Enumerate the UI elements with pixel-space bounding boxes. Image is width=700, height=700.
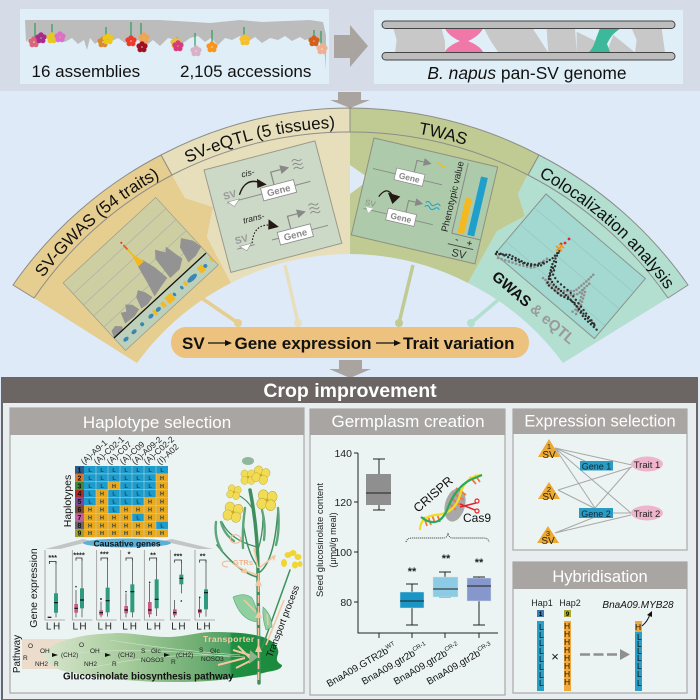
gene nodes: Gene 1 — [582, 462, 611, 472]
pink SV — [445, 28, 483, 52]
haplotype matrix: (A)-C09 — [118, 439, 147, 466]
dashed arrow — [580, 649, 630, 660]
Cas9 label: Cas9 — [463, 511, 491, 525]
haplotype swatches — [537, 610, 571, 618]
box chart: WT — [385, 641, 396, 651]
pointer arrow — [642, 611, 652, 626]
boxplots: L — [98, 622, 104, 633]
cross symbol: × — [551, 649, 559, 664]
chemical steps: O — [28, 643, 33, 650]
haplotype swatches: 9 — [566, 612, 570, 618]
box chart: Seed glucosinolate content — [315, 483, 326, 597]
heading: Expression selection — [524, 412, 676, 430]
haplotype matrix: 2 — [78, 475, 82, 482]
sector: SV-eQTL body — [172, 132, 350, 283]
SV nodes: 2 — [547, 485, 551, 494]
aligned segments — [393, 28, 665, 52]
chemical steps: Glc — [151, 648, 162, 655]
chemical steps: R — [171, 659, 176, 666]
causative genes label — [45, 538, 213, 549]
analysis headings on arc: TWAS — [420, 122, 467, 144]
phylogenetic tree — [25, 20, 326, 70]
chemical steps: Glc — [210, 648, 220, 655]
haplotype matrix: Haplotypes — [62, 475, 74, 527]
boxplots: *** — [100, 550, 109, 559]
chemical steps: R — [23, 655, 28, 662]
box chart — [315, 448, 498, 690]
teal SV — [589, 28, 621, 52]
box chart: BnaA09.GTR2b — [325, 646, 390, 690]
panel: TWAS diagram — [351, 138, 498, 264]
box chart: CR-3 — [477, 641, 493, 653]
panel: TWAS diagram: + — [465, 238, 474, 250]
arrow: assemblies to pan-genome — [334, 25, 368, 67]
transport process label: Transport process — [265, 584, 302, 659]
boxplots: H — [178, 622, 186, 633]
haplotype matrix: LLHLLLH — [88, 484, 164, 490]
chemical steps: OH — [40, 648, 50, 655]
boxplots: L — [46, 622, 52, 633]
haplotype matrix: 6 — [78, 507, 82, 514]
haplotype matrix: 9 — [78, 531, 82, 538]
boxplots: H — [130, 622, 137, 633]
cis regulation — [218, 153, 312, 210]
box chart: 80 — [340, 597, 352, 609]
boxplots: H — [53, 622, 60, 633]
chemical steps: NH2 — [35, 661, 48, 668]
gene nodes: Gene 2 — [581, 509, 611, 519]
trans regulation: SV — [234, 233, 250, 247]
panel: pan-SV genome — [374, 10, 683, 84]
genome label: B. napus pan-SV genome — [427, 63, 627, 83]
chemical steps: (CH2) — [118, 652, 135, 659]
dotted bracket — [406, 533, 489, 542]
haplotype matrix: (A)-A09-2 — [130, 434, 164, 466]
haplotype labels: Hap1 — [531, 598, 553, 608]
box chart: 100 — [334, 547, 352, 559]
chemical steps: NOSO3 — [201, 656, 224, 663]
cis regulation: SV — [222, 189, 238, 203]
haplotype matrix: (A)-A9-1 — [79, 437, 109, 466]
boxplots — [45, 550, 215, 633]
chromosome bars — [537, 621, 642, 691]
top band — [0, 0, 700, 91]
haplotype matrix: LHLLLHH — [88, 500, 164, 506]
biosynthesis label: Glucosinolate biosynthesis pathway — [63, 672, 234, 682]
boxplots: L — [196, 622, 202, 633]
chemical steps: S — [199, 647, 204, 654]
boxplots: H — [203, 622, 211, 633]
panel: TWAS diagram: Gene — [390, 210, 413, 225]
side flowers — [281, 550, 302, 568]
GWAS points — [496, 250, 597, 330]
pill: SV to trait flow: Trait variation — [403, 334, 514, 353]
cis regulation: cis- — [240, 166, 256, 179]
chromosome rods — [382, 21, 675, 28]
box chart: ** — [408, 566, 417, 578]
chromosome bars: H — [635, 622, 641, 632]
haplotype matrix: HHLHHHH — [88, 508, 164, 514]
SV nodes: 1 — [547, 442, 551, 451]
trait nodes — [631, 456, 663, 520]
section: crop improvement — [1, 377, 698, 700]
arrow: down to analyses — [330, 92, 370, 108]
flowers — [28, 31, 328, 56]
panel: TWAS diagram: Gene — [398, 170, 421, 185]
chart: colocalization — [495, 194, 645, 339]
boxplots: ** — [150, 550, 156, 559]
panel: TWAS diagram: - — [454, 234, 460, 246]
boxplots: L — [171, 622, 177, 633]
haplotype swatches: 1 — [539, 612, 543, 618]
chemical steps: R — [112, 661, 117, 668]
SV nodes: SV — [542, 492, 556, 503]
chromosome bars: HHHHHHHH — [564, 621, 570, 687]
haplotype matrix — [62, 434, 181, 538]
trans regulation: trans- — [242, 210, 266, 226]
boxplots: ** — [200, 552, 206, 561]
haplotype matrix: (A)-C02-2 — [142, 434, 176, 466]
SV nodes — [537, 439, 560, 547]
SV nodes: SV — [541, 536, 555, 547]
header arcs — [13, 108, 688, 298]
haplotype matrix: 5 — [78, 499, 82, 506]
analysis headings on arc: Colocalization analysis — [541, 168, 672, 288]
eQTL points — [498, 258, 594, 316]
assemblies label: 16 assemblies — [32, 62, 140, 81]
analysis headings on arc — [36, 116, 672, 288]
haplotype matrix: LHLLLLH — [88, 492, 164, 498]
icon: CRISPR helix — [420, 475, 482, 530]
sector: TWAS body — [350, 132, 528, 283]
gene nodes — [579, 461, 613, 519]
box chart: BnaA09.gtr2b — [425, 648, 482, 688]
haplotype matrix: LLLLLLL — [88, 468, 164, 474]
cis regulation: Gene — [266, 183, 292, 200]
panel: TWAS diagram: SV — [450, 247, 468, 262]
panel: expression selection — [513, 409, 687, 550]
chemical steps: O — [79, 642, 84, 649]
haplotype matrix: 1 — [78, 468, 82, 474]
chemical steps: S — [141, 648, 146, 655]
box chart: CR-1 — [412, 641, 428, 653]
boxplots: **** — [73, 550, 85, 559]
box chart: BnaA09.gtr2b — [392, 648, 449, 688]
panel: TWAS diagram: SV — [364, 198, 377, 209]
chemical steps: NH2 — [84, 661, 97, 668]
causative genes label: Causative genes — [93, 538, 161, 548]
pathway label: Pathway — [12, 635, 23, 673]
boxplots: H — [79, 622, 87, 633]
haplotype matrix: 8 — [78, 523, 82, 530]
haplotype matrix: (I)-A02 — [155, 441, 181, 466]
network links — [555, 448, 632, 533]
section title: Crop improvement — [263, 380, 437, 402]
box chart: 120 — [334, 497, 352, 509]
connector lines — [203, 265, 498, 327]
leaves — [233, 595, 272, 630]
seed pods — [216, 508, 279, 551]
chemical steps: (CH2) — [61, 652, 78, 659]
heading: Germplasm creation — [331, 412, 485, 431]
GTRs label: GTRs — [233, 558, 253, 567]
panel: TWAS diagram: Phenotypic value — [440, 160, 467, 233]
transporter label: Transporter — [203, 634, 255, 644]
trans regulation — [229, 195, 330, 256]
box chart: ** — [442, 553, 451, 565]
arrow: down to crop improvement — [329, 360, 371, 378]
panel: assemblies and accessions — [20, 9, 329, 84]
GWAS and eQTL label: GWAS & eQTL — [488, 268, 578, 348]
boxplots: *** — [174, 552, 182, 561]
stems and branches — [217, 490, 290, 683]
pill: SV to trait flow: SV — [182, 334, 205, 353]
box chart: BnaA09.gtr2b — [360, 648, 417, 688]
sector: colocalization body — [468, 174, 668, 363]
gene label: BnaA09.MYB28 — [602, 600, 674, 611]
pathway band — [12, 632, 282, 682]
boxplots: L — [146, 622, 152, 633]
chart: Manhattan plot — [63, 197, 218, 350]
panel: SV-eQTL diagram — [204, 141, 342, 272]
haplotype matrix: HHHHHHL — [88, 523, 164, 529]
heading: Hybridisation — [552, 568, 648, 586]
gene expression axis label: Gene expression — [28, 548, 40, 628]
boxplots: H — [154, 622, 161, 633]
chemical steps: NOSO3 — [141, 657, 164, 664]
boxplots: *** — [48, 553, 57, 562]
chromosome bars: LLLLLLLL — [539, 622, 544, 688]
boxplots: H — [105, 622, 112, 633]
pill: SV to trait flow: Gene expression — [234, 334, 372, 353]
trans regulation: Gene — [283, 227, 308, 244]
top associated points — [560, 238, 570, 245]
boxplots: * — [128, 550, 131, 559]
haplotype labels: Hap2 — [559, 598, 581, 608]
haplotype matrix: 7 — [78, 515, 82, 522]
haplotype matrix: (A)-C07 — [105, 439, 134, 466]
illustration: rapeseed plant — [216, 457, 302, 683]
panel: germplasm creation — [310, 409, 505, 695]
chemical steps: R — [54, 661, 59, 668]
SV nodes: SV — [542, 450, 556, 461]
analysis headings on arc: SV-GWAS (54 traits) — [36, 168, 158, 276]
pill: SV to trait flow — [171, 327, 529, 358]
panel: haplotype selection — [10, 408, 304, 693]
trait nodes: Trait 2 — [634, 509, 660, 520]
boxplots: L — [73, 622, 79, 633]
box chart: 140 — [334, 448, 352, 460]
transporter arrows — [218, 646, 256, 668]
chromosome bars: LLLLLLL — [637, 632, 642, 688]
panel: hybridisation — [513, 562, 687, 693]
haplotype matrix: HHHHLHH — [88, 515, 164, 521]
chemical steps — [23, 642, 224, 668]
haplotype labels — [531, 598, 581, 608]
peach transport arrows — [235, 548, 284, 680]
green stems — [35, 22, 321, 48]
box chart: ** — [475, 557, 484, 569]
accessions label: 2,105 accessions — [180, 62, 311, 81]
main flowers — [222, 465, 278, 524]
CRISPR label: CRISPR — [411, 474, 456, 515]
sector: SV-GWAS body — [34, 175, 231, 363]
SV nodes: 3 — [546, 529, 550, 538]
haplotype matrix: HHHHHHH — [88, 531, 164, 537]
box chart: CR-2 — [444, 641, 460, 653]
analysis headings on arc: SV-eQTL (5 tissues) — [185, 116, 334, 162]
boxplots: L — [122, 622, 128, 633]
chemical steps: OH — [90, 648, 100, 655]
haplotype matrix: (A)-C02-1 — [92, 434, 126, 466]
box chart: (μmol/g meal) — [328, 512, 338, 568]
haplotype matrix: 3 — [78, 483, 82, 490]
chemical steps: (CH2) — [176, 652, 193, 659]
heading: Haplotype selection — [83, 413, 231, 432]
haplotype matrix: LLLLLLH — [88, 476, 164, 482]
haplotype matrix: 4 — [78, 491, 82, 498]
trait nodes: Trait 1 — [634, 460, 660, 471]
